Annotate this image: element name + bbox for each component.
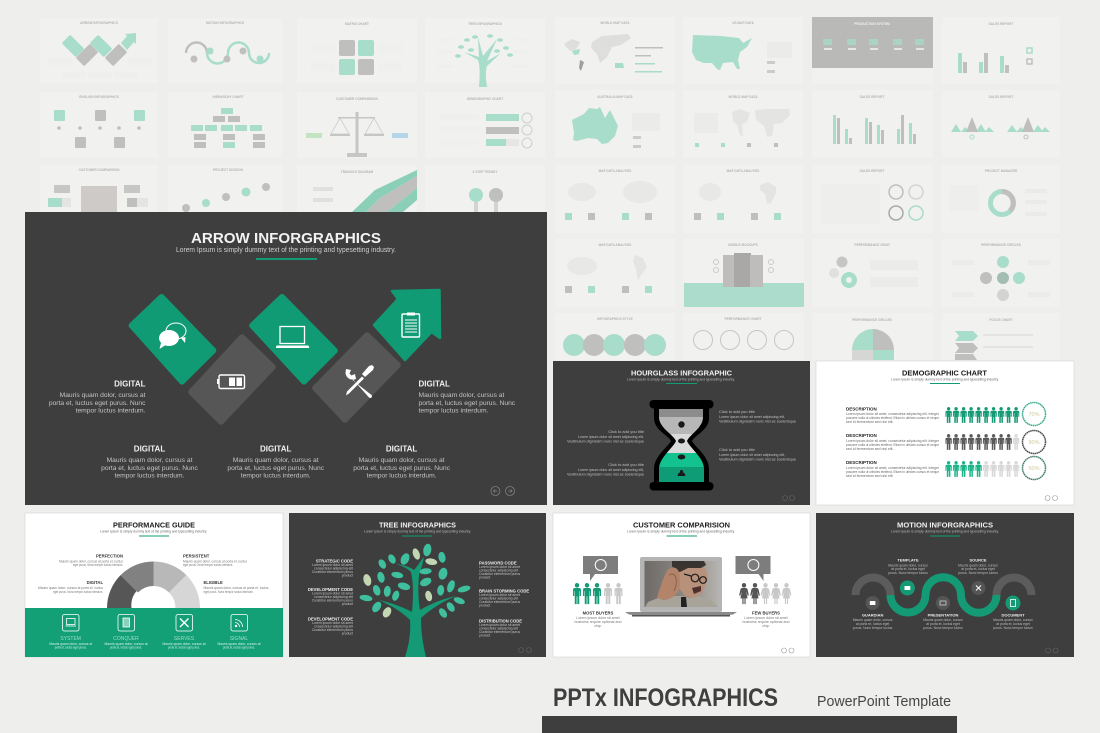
arrow step 3: green tile	[252, 297, 335, 382]
ghost slide: matrix chart: MATRIX CHART	[345, 22, 369, 26]
tree right labels: PASSWORD CODE	[479, 560, 517, 566]
subtitle: Lorem Ipsum is simply dummy text of the printing and typesetting industry.	[627, 378, 735, 382]
ghost slide: sales report bars: SALES REPORT	[989, 22, 1013, 26]
tree left labels: Curabitur elementum purus	[312, 570, 353, 574]
ghost slide: 4 step trendy: 4 STEP TRENDY	[473, 170, 498, 174]
tree leaves	[359, 543, 471, 619]
title: arrow infographics: ARROW INFORGRAPHICS	[191, 230, 381, 247]
text blocks: hourglass left	[567, 429, 645, 476]
ghost slide: us map data	[683, 17, 803, 84]
title: demographic: DEMOGRAPHIC CHART	[902, 368, 987, 378]
navigation arrows	[518, 648, 532, 652]
tree right labels: consectetur adipiscing elit	[479, 596, 518, 600]
tree left labels	[308, 558, 353, 636]
ghost slide: us map data: US MAP DATA	[732, 21, 754, 25]
text block: bottom digital 3	[353, 444, 451, 480]
ghost slide: map data analysis 2	[683, 165, 803, 233]
motion labels: purus. Nunc tempor luctus	[993, 626, 1033, 630]
description texts: Lorem ipsum dolor sit amet, consectetur adipiscing elit. Integer	[846, 439, 940, 443]
arrow step 1: green tile	[132, 297, 213, 382]
tree trunk	[379, 557, 456, 657]
band labels: porta et, luctus eget purus.	[110, 646, 142, 650]
speech bubble left	[583, 556, 618, 581]
ghost slide: world map data	[555, 17, 675, 84]
text block: bottom digital 2: DIGITAL	[260, 444, 292, 454]
tree right labels: Lorem ipsum dolor sit amet	[479, 623, 520, 627]
node: guardian	[866, 596, 880, 610]
text block: left digital	[49, 380, 146, 414]
pictogram row 3	[945, 461, 1019, 477]
subtitle: Lorem Ipsum is simply dummy text of the printing and typesetting industry.	[891, 378, 999, 382]
description texts: Lorem ipsum dolor sit amet, consectetur adipiscing elit. Integer	[846, 412, 940, 416]
motion labels: TEMPLATE	[897, 558, 919, 562]
subtitle: Lorem Ipsum is simply dummy text of the printing and typesetting industry.	[364, 530, 471, 534]
donut labels: Mauris quam dolor, cursus at porta et, luctus	[204, 586, 269, 590]
title: tree: TREE INFOGRAPHICS	[379, 520, 456, 530]
label: most buyers: Lorem ipsum dolor sit amet	[576, 616, 620, 620]
text blocks: hourglass left: Vestibulum dignissim nunc nisi ac scelerisque	[567, 472, 645, 476]
panel: performance guide	[25, 513, 283, 657]
ghost slide: production system	[812, 17, 933, 84]
ghost slide: tree infographics: TREE INFOGRAPHICS	[468, 22, 502, 26]
ghost slide: performance chart	[683, 313, 804, 360]
icon: conquer	[118, 614, 134, 631]
ghost slide: performance gear: PERFORMANCE GEAR	[854, 243, 890, 247]
motion labels: Mauris quam dolor, cursus	[853, 618, 893, 622]
ghost slide: infographics style	[555, 313, 675, 360]
donut labels: PERFECTION	[96, 554, 123, 558]
ghost slide: motion infographics	[168, 18, 282, 83]
ghost slide: map data analysis 1: MAP DATA ANALYSIS	[599, 169, 631, 173]
title: hourglass: HOURGLASS INFOGRAPHIC	[631, 368, 733, 378]
text block: right digital: Mauris quam dolor, cursus at	[418, 392, 505, 399]
ghost slide: arrow infographics: ARROW INFOGRAPHICS	[80, 21, 118, 25]
ghost slide: sales report columns	[812, 90, 933, 158]
motion labels: purus. Nunc tempor luctus	[888, 571, 928, 575]
ghost slide: australia map data: AUSTRALIA MAP DATA	[597, 95, 633, 99]
icon: battery	[217, 375, 244, 388]
ghost slide: mobile mockups	[683, 239, 804, 307]
tree left labels: DEVELOPMENT CODE	[308, 616, 353, 622]
band labels: porta et, luctus eget purus.	[168, 646, 200, 650]
label: few buyers: chip.	[762, 624, 770, 628]
pictogram row 1	[945, 407, 1019, 423]
people: few buyers	[739, 583, 791, 604]
motion labels: DOCUMENT	[1001, 612, 1025, 618]
donut labels: ELIGIBLE	[204, 580, 223, 585]
text block: right digital: DIGITAL	[418, 380, 450, 388]
band labels: CONQUER	[113, 636, 139, 642]
tree right labels: product	[479, 576, 490, 580]
ghost slide: motion infographics: MOTION INFOGRAPHICS	[206, 21, 244, 25]
label: few buyers: FEW BUYERS	[752, 610, 780, 616]
text block: left digital: Mauris quam dolor, cursus at	[60, 392, 146, 399]
band labels: Mauris quam dolor, cursus at	[49, 642, 92, 646]
ghost slide: arrow infographics	[40, 18, 158, 83]
band labels: Mauris quam dolor, cursus at	[162, 642, 206, 646]
title: performance guide: PERFORMANCE GUIDE	[113, 520, 195, 530]
arrow step 5: green arrowhead	[374, 290, 440, 360]
green band	[25, 608, 283, 657]
motion labels: PRESENTATION	[928, 612, 958, 618]
subtitle: Lorem Ipsum is simply dummy text of the printing and typesetting industry.	[100, 530, 207, 534]
panel: arrow infographics	[25, 212, 547, 505]
percent ring 70%	[1022, 402, 1046, 426]
icon: system	[62, 614, 79, 631]
ghost slide: performance chart: PERFORMANCE CHART	[724, 317, 762, 321]
pictogram row 2	[945, 434, 1019, 450]
band labels	[49, 636, 261, 650]
motion labels: purus. Nunc tempor luctus	[958, 571, 998, 575]
tree left labels: product	[342, 574, 353, 578]
ghost slide: project manager	[942, 165, 1060, 233]
icon: serves	[176, 614, 192, 631]
panel: demographic chart	[816, 361, 1074, 505]
tree graphic	[359, 543, 471, 657]
navigation arrows	[491, 486, 514, 496]
ghost slide: performance circles pie	[812, 313, 933, 360]
percent ring 50%	[1022, 456, 1046, 480]
motion wave	[856, 577, 1032, 613]
ghost slide: mobile mockups: MOBILE MOCKUPS	[728, 243, 758, 247]
description texts: Lorem ipsum dolor sit amet, consectetur adipiscing elit. Integer	[846, 466, 940, 470]
ghost slide: english infographics: ENGLISH INFOGRAPHICS	[79, 95, 119, 99]
motion labels: at porta et, luctus eget	[891, 567, 925, 571]
ghost slide: sales report donuts	[812, 165, 933, 233]
ghost slide: triangle diagram: TRIANGLE DIAGRAM	[341, 170, 374, 174]
heading underline	[666, 536, 697, 537]
text blocks: hourglass left: Vestibulum dignissim nunc nisi ac scelerisque	[567, 438, 645, 444]
tree left labels: Curabitur elementum purus	[312, 628, 353, 632]
text blocks: hourglass right: Vestibulum dignissim nunc nisi ac scelerisque	[719, 418, 797, 424]
motion labels	[853, 558, 1033, 630]
tree right labels: Curabitur elementum purus	[479, 600, 520, 604]
label: most buyers: business require optional and	[575, 620, 621, 624]
ghost slide: world map data: WORLD MAP DATA	[600, 21, 630, 25]
icon: signal	[231, 614, 248, 631]
title: customer: CUSTOMER COMPARISION	[633, 520, 730, 530]
text block: bottom digital 2: porta et, luctus eget purus. Nunc	[227, 465, 325, 472]
heading underline	[930, 536, 960, 537]
text block: right digital: tempor luctus interdum.	[418, 408, 489, 414]
ghost slide: australia map data	[555, 90, 675, 158]
arrow step 2: gray tile	[191, 337, 273, 422]
ghost slide: demographic chart: DEMOGRAPHIC CHART	[467, 97, 503, 101]
ghost slide: focus chart: FOCUS CHART	[989, 318, 1013, 322]
hourglass caps	[650, 400, 714, 408]
tree right labels: consectetur adipiscing elit	[479, 626, 518, 630]
text blocks: hourglass right: Lorem ipsum dolor sit amet adipiscing elit,	[719, 452, 785, 457]
text blocks: hourglass left: Lorem ipsum dolor sit amet adipiscing elit,	[578, 434, 644, 439]
description texts: posuere nulla ut ultricies eleifend. Etiam in ultrices cursus et neque	[846, 470, 939, 474]
panel: customer comparision	[553, 513, 810, 657]
description texts: DESCRIPTION	[846, 433, 877, 438]
speech bubble right	[736, 556, 770, 581]
motion labels: at porta et, luctus eget	[856, 622, 889, 626]
ghost slide: performance circles pie: PERFORMANCE CIRCLES	[852, 318, 892, 322]
description texts: sed id fermentum sed nisl elit.	[846, 474, 894, 478]
ghost slide: infographics style: INFOGRAPHICS STYLE	[597, 317, 633, 321]
text block: bottom digital 3: tempor luctus interdum.	[367, 472, 437, 480]
text block: bottom digital 2: Mauris quam dolor, cursus at	[233, 457, 319, 464]
text blocks: hourglass left: Click to add you title	[608, 462, 645, 467]
motion labels: Mauris quam dolor, cursus	[958, 564, 998, 568]
donut labels	[38, 554, 269, 594]
ghost slide: production system: PRODUCTION SYSTEM	[854, 22, 890, 26]
ghost slide: hierarchy chart	[168, 92, 282, 158]
ghost slide: matrix chart	[297, 18, 417, 83]
donut labels: PERSISTENT	[183, 554, 210, 558]
label: few buyers: business require optional and	[743, 620, 789, 624]
pale leaves	[362, 547, 438, 619]
tree left labels: Lorem ipsum dolor sit amet	[312, 563, 353, 567]
motion labels: GUARDIAN	[862, 612, 883, 618]
photo: shirt, head, hand	[645, 561, 718, 607]
ghost slide: project division	[168, 165, 282, 212]
ghost slide: focus chart	[942, 313, 1060, 360]
text block: bottom digital 1: Mauris quam dolor, cursus at	[107, 457, 193, 464]
ghost slide: project division: PROJECT DIVISION	[213, 168, 244, 172]
tree left labels: consectetur adipiscing elit	[314, 566, 353, 570]
tree right labels: Curabitur elementum purus	[479, 572, 520, 576]
ghost slide: performance gear	[812, 239, 933, 307]
heading underline	[256, 258, 317, 260]
panel: motion infographics	[816, 513, 1074, 657]
donut labels: eget purus. Nunc tempor luctus interdum.	[204, 590, 254, 594]
donut labels: eget purus. Nunc tempor luctus interdum.	[183, 563, 233, 567]
ghost slide: triangle diagram	[297, 165, 417, 212]
motion labels: Mauris quam dolor, cursus	[993, 618, 1033, 622]
navigation arrows	[782, 496, 794, 500]
ghost slide: world map: WORLD MAP DATA	[728, 95, 758, 99]
percent ring 90%: 90%	[1028, 440, 1040, 446]
ghost slide: performance circles	[942, 239, 1060, 307]
label: most buyers: MOST BUYERS	[583, 610, 614, 616]
label: few buyers	[743, 610, 789, 628]
tree right labels: Lorem ipsum dolor sit amet	[479, 593, 520, 597]
ghost slide: customer comparison	[40, 165, 158, 212]
tree left labels: product	[342, 602, 353, 606]
text block: bottom digital 2: tempor luctus interdum.	[241, 472, 311, 480]
icon: chat bubbles	[159, 323, 186, 349]
band labels: porta et, luctus eget purus.	[223, 646, 255, 650]
text block: left digital: tempor luctus interdum.	[76, 408, 146, 414]
tree right labels: Curabitur elementum purus	[479, 630, 520, 634]
description texts: posuere nulla ut ultricies eleifend. Etiam in ultrices cursus et neque	[846, 443, 939, 447]
ghost slide: sales report bars	[942, 17, 1060, 84]
text block: bottom digital 3: DIGITAL	[386, 444, 417, 454]
subtitle: Lorem Ipsum is simply dummy text of the printing and typesetting industry.	[176, 247, 396, 254]
subheading: powerpoint template: PowerPoint Template	[817, 693, 951, 710]
icon: wrench and screwdriver	[346, 365, 374, 398]
tree right labels: consectetur adipiscing elit	[479, 568, 518, 572]
donut labels: eget purus. Nunc tempor luctus interdum.	[73, 563, 123, 567]
heading underline	[930, 383, 960, 384]
donut labels: Mauris quam dolor, cursus at porta et, luctus	[38, 586, 103, 590]
percent ring 70%: 70%	[1028, 412, 1040, 418]
tree right labels: BRAIN STORMING CODE	[479, 588, 529, 594]
description texts	[846, 406, 940, 478]
heading underline	[139, 536, 169, 537]
text block: bottom digital 3: Mauris quam dolor, cursus at	[359, 457, 445, 464]
tree left labels: STRATEGIC CODE	[316, 558, 353, 564]
motion labels: purus. Nunc tempor luctus	[853, 626, 893, 630]
subtitle: Lorem Ipsum is simply dummy text of the printing and typesetting industry.	[627, 530, 735, 534]
band labels: SYSTEM	[60, 636, 81, 642]
tree right labels: DISTRIBUTION CODE	[479, 618, 522, 624]
tree right labels: product	[479, 634, 490, 638]
heading: pptx infographics: PPTx INFOGRAPHICS	[553, 685, 778, 712]
text block: bottom digital 2	[227, 444, 325, 480]
laptop with shouting man photo	[625, 557, 737, 616]
donut labels: Mauris quam dolor, cursus at porta et, luctus	[59, 560, 123, 564]
ghost slide: tree infographics	[425, 18, 545, 87]
tree right labels: Lorem ipsum dolor sit amet	[479, 565, 520, 569]
ghost slide: demographic chart	[425, 92, 545, 158]
ghost slide: world map	[683, 90, 803, 158]
ghost slide: map data analysis 3	[555, 239, 675, 307]
text blocks: hourglass right: Click to add you title	[719, 409, 756, 414]
ghost slide: 4 step trendy	[425, 165, 545, 212]
ghost slide: scales	[297, 92, 417, 158]
text block: bottom digital 1: tempor luctus interdum.	[115, 472, 185, 480]
band labels: Mauris quam dolor, cursus at	[104, 642, 148, 646]
band labels: SIGNAL	[230, 636, 248, 642]
heading underline	[402, 536, 432, 537]
text block: right digital	[418, 380, 516, 414]
motion labels: Mauris quam dolor, cursus	[888, 564, 928, 568]
title: motion: MOTION INFORGRAPHICS	[897, 520, 993, 530]
tree left labels: DEVELOPMENT CODE	[308, 587, 353, 592]
tree left labels: consectetur adipiscing elit	[314, 595, 353, 599]
ghost slide: customer comparison: CUSTOMER COMPARISON	[79, 168, 120, 172]
description texts: posuere nulla ut ultricies eleifend. Etiam in ultrices cursus et neque	[846, 416, 939, 420]
ghost slide: sales report columns: SALES REPORT	[860, 95, 884, 99]
text block: bottom digital 1: DIGITAL	[134, 444, 165, 454]
ghost slide: project manager: PROJECT MANAGER	[985, 169, 1018, 173]
label: most buyers	[575, 610, 621, 628]
percent ring 90%	[1022, 430, 1046, 454]
node: template	[900, 580, 915, 596]
text block: bottom digital 1: porta et, luctus eget purus. Nunc	[101, 465, 198, 472]
label: most buyers: chip.	[594, 624, 602, 628]
half donut chart	[107, 562, 200, 608]
text block: left digital: DIGITAL	[114, 380, 146, 388]
panel: tree infographics	[289, 513, 546, 657]
motion labels: Mauris quam dolor, cursus	[923, 618, 963, 622]
donut labels: eget purus. Nunc tempor luctus interdum.	[53, 590, 103, 594]
band labels: porta et, luctus eget purus.	[55, 646, 87, 650]
tree right labels	[479, 560, 529, 638]
text blocks: hourglass left: Lorem ipsum dolor sit amet adipiscing elit,	[578, 467, 644, 472]
hourglass small icons	[678, 421, 686, 476]
arrow step 4: gray tile	[315, 335, 398, 420]
heading underline	[666, 383, 697, 384]
percent ring 50%: 50%	[1028, 466, 1040, 472]
ghost slide: sales report donuts: SALES REPORT	[860, 169, 884, 173]
node: source	[971, 581, 985, 595]
band labels: SERVES	[174, 636, 195, 642]
ghost slide: scales: CUSTOMER COMPARISION	[336, 97, 379, 101]
subtitle: Lorem Ipsum is simply dummy text of the printing and typesetting industry.	[891, 530, 999, 534]
hourglass graphic	[650, 400, 714, 490]
tree left labels: Curabitur elementum purus	[312, 598, 353, 602]
tree left labels: Lorem ipsum dolor sit amet	[312, 592, 353, 596]
text block: bottom digital 1	[101, 444, 198, 480]
motion labels: at porta et, luctus eget	[996, 622, 1030, 626]
ghost slide: map data analysis 1	[555, 165, 675, 233]
tree left labels: consectetur adipiscing elit	[314, 624, 353, 628]
text block: left digital: porta et, luctus eget purus. Nunc	[49, 400, 146, 407]
description texts: sed id fermentum sed nisl elit.	[846, 420, 894, 424]
text blocks: hourglass right: Lorem ipsum dolor sit amet adipiscing elit,	[719, 414, 785, 419]
navigation arrows	[782, 648, 794, 653]
description texts: sed id fermentum sed nisl elit.	[846, 447, 894, 451]
text blocks: hourglass right: Vestibulum dignissim nunc nisi ac scelerisque	[719, 456, 797, 462]
text block: bottom digital 3: porta et, luctus eget purus. Nunc	[353, 465, 451, 472]
band labels: Mauris quam dolor, cursus at	[218, 642, 261, 646]
people: most buyers	[573, 583, 622, 604]
dark strip: next slide edge	[542, 716, 957, 733]
description texts: DESCRIPTION	[846, 460, 877, 465]
motion labels: at porta et, luctus eget	[961, 567, 995, 571]
motion labels: SOURCE	[969, 558, 987, 562]
navigation arrows	[1046, 648, 1058, 653]
donut labels: Mauris quam dolor, cursus at porta et, luctus	[183, 560, 247, 564]
node: presentation	[936, 596, 950, 610]
text blocks: hourglass left: Click to add you title	[608, 429, 645, 434]
ghost slide: sales report peaks	[942, 90, 1060, 158]
ghost slide: english infographics	[40, 92, 158, 158]
label: few buyers: Lorem ipsum dolor sit amet	[744, 616, 788, 620]
text block: right digital: porta et, luctus eget purus. Nunc	[418, 400, 516, 407]
ghost slide: sales report peaks: SALES REPORT	[989, 95, 1013, 99]
tree left labels: Lorem ipsum dolor sit amet	[312, 621, 353, 625]
motion labels: at porta et, luctus eget	[926, 622, 960, 626]
ghost slide: performance circles: PERFORMANCE CIRCLES	[981, 243, 1021, 247]
navigation arrows	[1045, 496, 1058, 500]
motion labels: purus. Nunc tempor luctus	[923, 626, 963, 630]
ghost slide: map data analysis 2: MAP DATA ANALYSIS	[727, 169, 759, 173]
node: document	[1006, 596, 1020, 610]
description texts: DESCRIPTION	[846, 406, 877, 412]
icon: clipboard	[402, 312, 420, 337]
text blocks: hourglass right: Click to add you title	[719, 447, 756, 452]
tree right labels: product	[479, 604, 490, 608]
ghost slide: hierarchy chart: HIERARCHY CHART	[213, 95, 244, 99]
text blocks: hourglass right	[719, 409, 797, 462]
ghost slide: map data analysis 3: MAP DATA ANALYSIS	[599, 243, 631, 247]
panel: hourglass infographic	[553, 361, 810, 505]
donut labels: DIGITAL	[87, 580, 103, 585]
tree left labels: product	[342, 632, 353, 636]
icon: laptop	[276, 326, 309, 348]
ghost slide grid	[40, 17, 1060, 360]
